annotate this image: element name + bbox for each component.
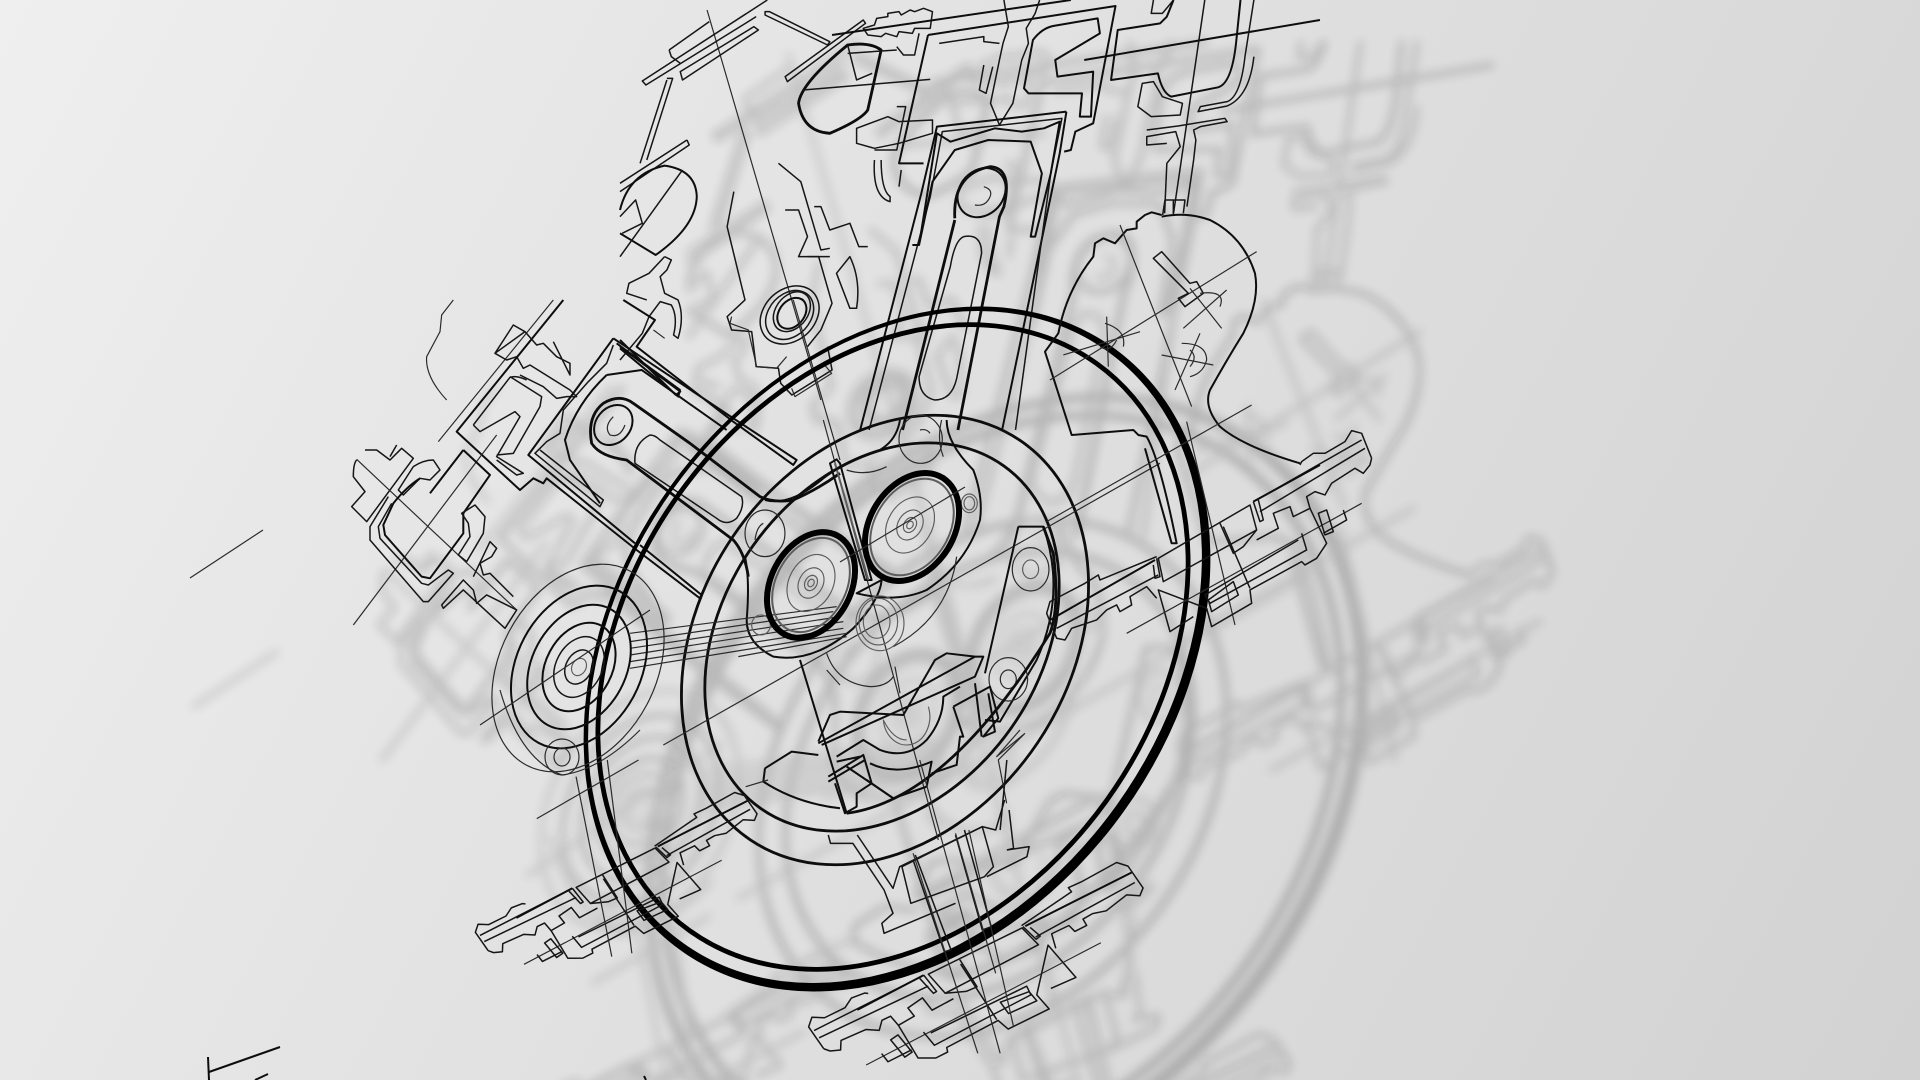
crankcase rings xyxy=(476,210,1310,1080)
upper engine section: cylinder head and connecting rod xyxy=(620,0,1320,430)
camshaft: lower left xyxy=(469,712,763,1034)
cam lobe housing at upper right xyxy=(1045,200,1300,625)
camshaft: bottom xyxy=(801,767,1150,1080)
crankcase ring B xyxy=(632,374,1132,900)
bold cylinder bore: right xyxy=(840,456,978,598)
outer flywheel ring xyxy=(584,307,1210,991)
crankcase ring A xyxy=(598,337,1172,943)
central cam mechanism xyxy=(630,415,1160,840)
blurred shadow of the drawing xyxy=(194,42,1552,1080)
left engine section: second cylinder and connecting rod xyxy=(352,300,840,628)
main line drawing xyxy=(190,0,1372,1080)
bold cylinder bore: left xyxy=(749,517,873,653)
lower flange and stem xyxy=(537,760,1029,1053)
stray construction lines xyxy=(190,530,646,1080)
concentric pulley on the left xyxy=(457,534,699,802)
inner flywheel ring xyxy=(476,210,1310,1080)
camshaft: right xyxy=(1047,431,1372,640)
